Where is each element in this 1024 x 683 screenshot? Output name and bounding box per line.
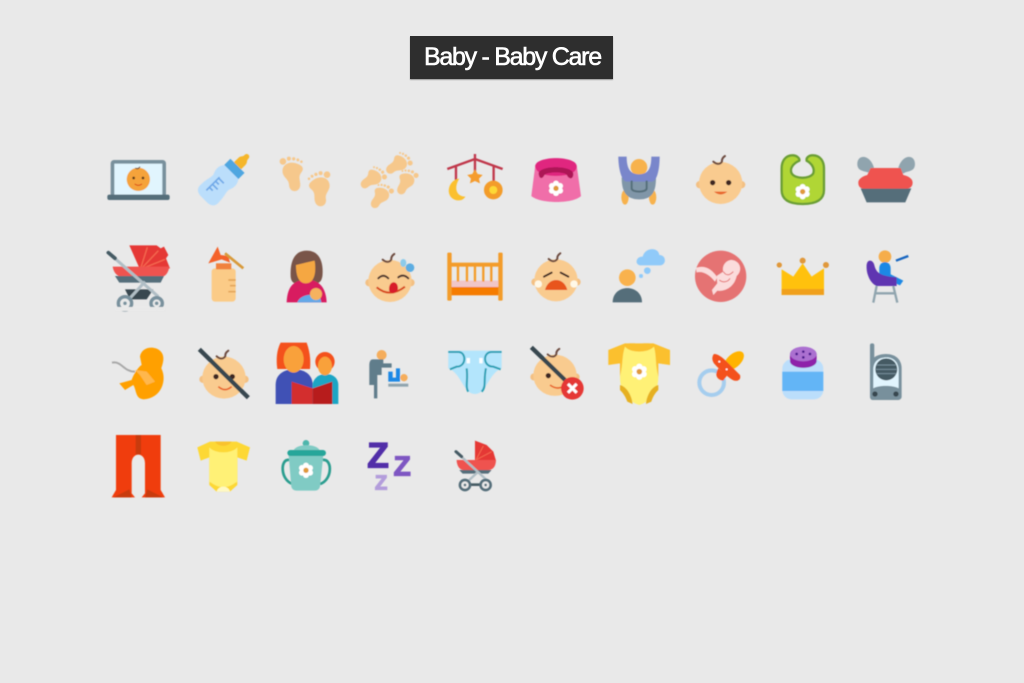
icon: bib (782, 155, 824, 204)
icon: baby in high chair (867, 250, 908, 303)
icon: yellow onesie (197, 442, 250, 492)
title (410, 36, 613, 79)
icon: crown (777, 258, 829, 295)
icon: baby bottle (195, 146, 257, 208)
icon: baby powder (782, 347, 823, 399)
icon: stroller (108, 245, 170, 311)
icon: baby footprints (279, 155, 334, 207)
icon: sleeping Zzz (367, 437, 411, 495)
icon: potty (531, 158, 581, 202)
icon: breastfeeding mother (287, 251, 327, 302)
icon: no baby cross (530, 347, 584, 400)
icon: diaper (448, 351, 502, 394)
icon: sippy cup (283, 440, 330, 491)
icon: baby bodysuit with flower (608, 343, 670, 405)
icon: crib (447, 253, 503, 301)
icon: booster seat (857, 157, 915, 202)
icon: small stroller (456, 441, 496, 490)
icon: baby licking lips (365, 254, 415, 302)
icon: breast pump (208, 247, 243, 302)
icon: red tights (112, 435, 165, 497)
icon: sleeping Zzz: Z (394, 450, 411, 481)
icon: no baby (199, 349, 249, 399)
icon: embryo in circle (695, 251, 746, 302)
icon: baby face (696, 156, 745, 204)
icon: orange fetus (112, 348, 164, 399)
icon: crib mobile (447, 154, 503, 200)
icon: baby monitor (870, 343, 902, 400)
icon: sleeping Zzz: Z (375, 473, 387, 495)
icon: laptop with baby (107, 160, 170, 200)
title: Baby - Baby Care (424, 43, 601, 71)
icon: crying baby (531, 253, 581, 301)
icon: sleeping Zzz: Z (367, 437, 389, 476)
icon: baby carrier (618, 157, 660, 205)
icon: parent dreaming of baby (613, 249, 665, 302)
icon: pacifier (699, 348, 747, 395)
icon: changing a baby (369, 350, 408, 398)
icon: four footprints (356, 149, 420, 213)
icon: mother reading with child (276, 343, 338, 404)
